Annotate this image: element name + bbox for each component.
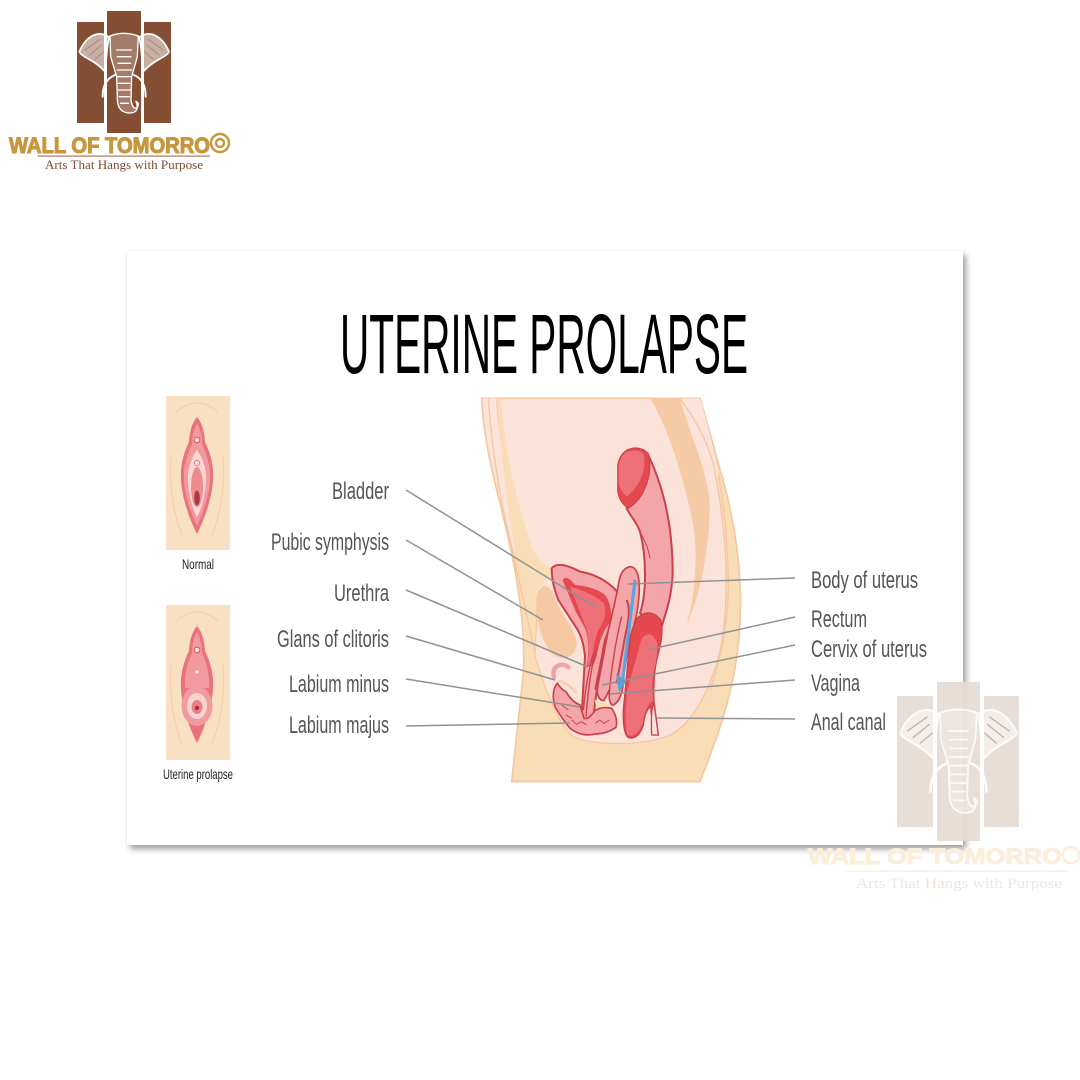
vagina and cervix: [597, 567, 639, 705]
leader lines: [406, 490, 795, 726]
labels: right: [811, 567, 927, 736]
colon end: [618, 448, 650, 508]
clitoris: [553, 665, 568, 677]
labels: left: Labium majus: [289, 712, 389, 739]
blue prolapse arrow: [623, 580, 635, 680]
labels: right: Anal canal: [811, 709, 886, 736]
panel: normal external view: [166, 396, 230, 550]
labels: right: Vagina: [811, 670, 860, 697]
labels: left: Bladder: [332, 478, 389, 505]
watermark tagline: Arts That Hangs with Purpose: [856, 876, 1062, 892]
peach fat strip: [497, 398, 555, 657]
labels: left: Glans of clitoris: [277, 626, 389, 653]
logo wordmark: WALL OF TOMORRO: [9, 133, 210, 158]
watermark swirl: [1063, 847, 1079, 863]
icon: logo bars: [77, 11, 171, 133]
labels: right: Cervix of uterus: [811, 636, 927, 663]
labels: left: Urethra: [334, 580, 389, 607]
bladder: [552, 565, 617, 721]
pubic symphysis: [537, 586, 577, 658]
watermark bars: [897, 682, 1019, 841]
anatomy diagram: sagittal section: [482, 398, 740, 782]
logo: top-left Wall of Tomorrow: [9, 11, 229, 172]
urethra folds: [583, 603, 617, 717]
upper tissue: [483, 398, 719, 577]
pelvic cavity: [497, 398, 726, 744]
anal canal: [651, 703, 658, 735]
watermark wordmark: WALL OF TOMORRO: [808, 844, 1062, 869]
watermark logo: [808, 682, 1079, 892]
label: Uterine prolapse: Uterine prolapse: [163, 766, 233, 782]
label: Normal: Normal: [182, 556, 214, 572]
panel: prolapse external view: [166, 605, 230, 760]
peach gap: [595, 700, 612, 712]
labia: [553, 683, 617, 735]
rectum: [623, 613, 662, 738]
icon: logo elephant: [79, 33, 169, 113]
abdominal muscle: [650, 398, 710, 625]
icon: logo swirl: [211, 134, 229, 152]
labels: right: Body of uterus: [811, 567, 918, 594]
labels: left: [271, 478, 389, 739]
labels: right: Rectum: [811, 606, 867, 633]
sigmoid colon tube: [627, 449, 673, 627]
labels: left: Pubic symphysis: [271, 529, 389, 556]
labels: left: Labium minus: [289, 671, 389, 698]
body skin: [482, 398, 740, 782]
watermark elephant: [900, 709, 1017, 813]
logo tagline: Arts That Hangs with Purpose: [45, 158, 203, 172]
panel: poster card: [127, 251, 963, 845]
